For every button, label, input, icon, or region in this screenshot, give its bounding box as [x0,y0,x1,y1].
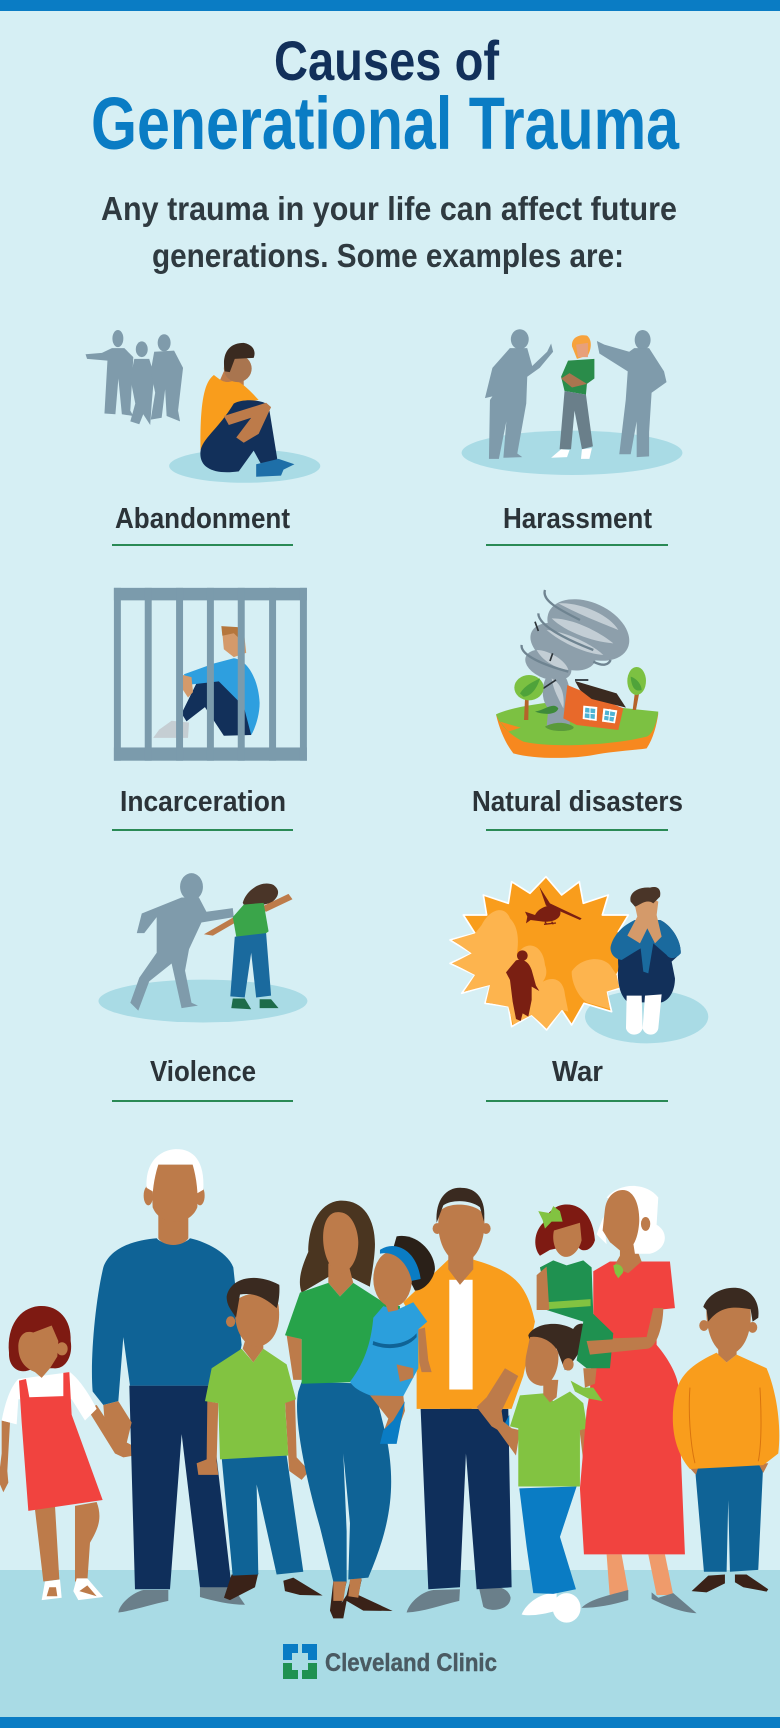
heading: violence: Violence [150,1056,256,1088]
heading: incarceration: Incarceration [120,786,286,818]
person: boy in orange sweater [673,1288,779,1592]
person: grandfather [92,1149,245,1613]
illustration: harassment [462,329,682,475]
illustration: natural disasters [496,587,658,758]
person: little girl in red dress [0,1306,142,1600]
illustration: family group [0,1149,779,1623]
logo: Cleveland Clinic: Cleveland Clinic [325,1649,497,1677]
illustration: violence [98,873,307,1022]
illustration: abandonment [86,330,320,483]
person: mother [285,1201,400,1618]
heading: abandonment: Abandonment [115,503,290,535]
title: Causes of [274,29,499,92]
title [91,29,680,165]
person: grandmother holding toddler [580,1186,697,1613]
logo: Cleveland Clinic [283,1644,497,1679]
person: boy in green shirt [197,1278,323,1600]
heading: harassment: Harassment [503,503,652,535]
person: baby in blue dress [350,1236,435,1444]
intro text: generations. Some examples are: [152,237,624,274]
illustration: incarceration [114,588,307,761]
intro text: Any trauma in your life can affect future [101,190,677,227]
person: toddler on hip [535,1204,647,1401]
heading: war: War [552,1056,603,1088]
illustration: war [450,877,708,1043]
person: father [403,1188,535,1613]
heading: natural disasters: Natural disasters [472,786,683,818]
person: girl in green shirt [495,1324,617,1623]
intro text [101,190,677,274]
